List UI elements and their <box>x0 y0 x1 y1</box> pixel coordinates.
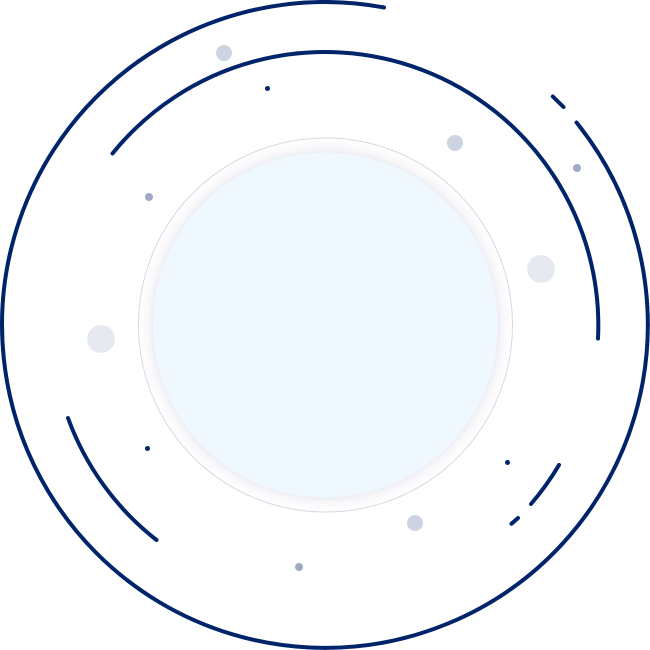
inner ring top arc <box>112 52 598 339</box>
inner ring lower-right arc <box>531 465 559 504</box>
small grey-blue dots <box>145 164 581 571</box>
inner ring lower-right dash <box>512 518 518 524</box>
tiny navy dots <box>145 86 510 465</box>
medium dots <box>216 45 463 531</box>
large pale dots <box>87 255 555 353</box>
inner ring lower-left arc <box>68 418 156 540</box>
central circle <box>138 138 512 512</box>
outer ring short dash <box>553 96 564 107</box>
